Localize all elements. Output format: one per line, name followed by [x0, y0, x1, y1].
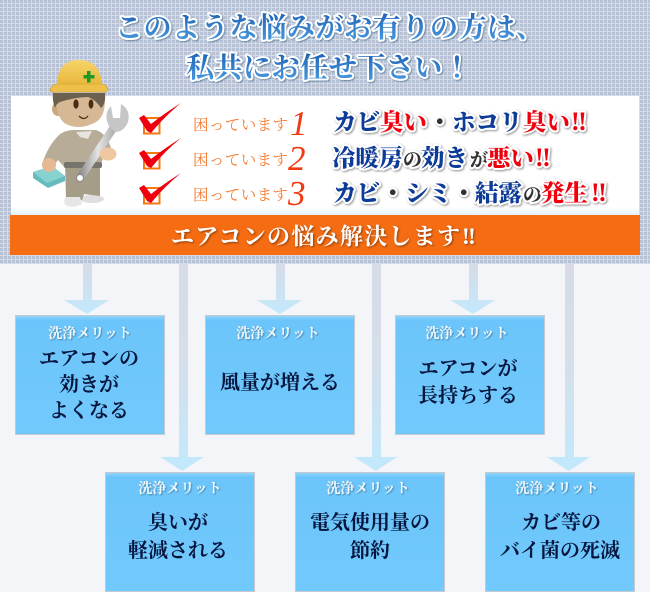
title: このような悩みがお有りの方は、 [115, 11, 544, 44]
problem 1 text: カビ [333, 110, 380, 136]
problem 2 text: 冷暖房 [332, 144, 402, 172]
panel: merit 6: カビ等の [521, 511, 601, 534]
problem 3 text: ・ [452, 181, 476, 207]
problem 1 text: 臭い [380, 109, 427, 136]
panel: merit 1: エアコンの [39, 348, 139, 370]
problem 3 text: シミ [405, 181, 452, 207]
problem 2 text: 悪い [487, 145, 534, 172]
problem 3 text: 発生 [541, 179, 588, 207]
panel: merit 5: 節約 [350, 539, 390, 562]
checklist row 2: 2 [288, 139, 306, 178]
problem 1 text: ホコリ [452, 110, 522, 136]
arrow 4 [354, 264, 397, 471]
problem 2 text: 効き [421, 145, 468, 172]
panel: merit 6 [486, 472, 634, 592]
arrow 1 [64, 264, 109, 314]
problem 3 text: !! [591, 178, 605, 207]
orange banner [10, 215, 640, 255]
checklist row 3: 困っています [193, 186, 288, 204]
problem 2 text: の [403, 150, 422, 171]
panel: merit 5: 洗浄メリット [326, 480, 410, 497]
panel: merit 1: 効きが [59, 373, 119, 396]
arrow 6 [547, 264, 590, 471]
panel: merit 3: 洗浄メリット [425, 325, 509, 342]
panel: merit 3 [396, 316, 544, 434]
checklist row 2 [139, 138, 306, 178]
arrow 5 [450, 264, 495, 314]
panel: merit 4: 軽減される [128, 539, 228, 562]
panel: merit 1: よくなる [49, 399, 129, 422]
panel: merit 2 [206, 316, 354, 434]
panel: merit 4 [106, 472, 254, 592]
checklist row 2: 困っています [193, 151, 288, 169]
checklist row 1: 困っています [193, 116, 288, 134]
problem 1 text: ・ [428, 110, 452, 136]
problem 2 text: が [470, 150, 488, 170]
problem 1 text: !! [571, 107, 585, 136]
white panel [11, 96, 639, 215]
panel: merit 1 [16, 316, 164, 434]
panel: merit 2: 洗浄メリット [236, 325, 320, 342]
panel: merit 6: バイ菌の死滅 [500, 539, 620, 562]
panel: merit 5 [296, 472, 444, 592]
problem 3 text: ・ [381, 181, 404, 207]
panel: merit 3: エアコンが [418, 358, 518, 380]
problem 1 text: 臭い [523, 109, 570, 136]
panel: merit 5: 電気使用量の [310, 511, 430, 534]
arrow 2 [160, 264, 204, 471]
problem 3 text: 結露 [475, 179, 522, 207]
title: 私共にお任せ下さい！ [186, 52, 471, 84]
checklist row 1 [139, 103, 308, 143]
panel: merit 6: 洗浄メリット [515, 480, 599, 497]
panel: merit 4: 洗浄メリット [138, 480, 222, 497]
title [115, 11, 544, 84]
checklist row 3: 3 [287, 174, 306, 213]
orange banner: エアコンの悩み解決します [171, 224, 461, 249]
problem 3 text: カビ [333, 181, 380, 207]
problem 2 text: !! [535, 143, 549, 172]
problem 3 text: の [523, 185, 542, 206]
panel: merit 3: 長持ちする [418, 384, 518, 407]
page background [0, 264, 650, 592]
checklist row 3 [139, 173, 306, 213]
orange banner: !! [462, 224, 474, 249]
arrow 3 [257, 264, 302, 314]
panel: merit 1: 洗浄メリット [48, 325, 132, 342]
panel: merit 4: 臭いが [148, 511, 208, 534]
panel: merit 2: 風量が増える [220, 371, 340, 394]
patterned header background [0, 0, 650, 264]
icon: worker with wrench and toolbox [33, 60, 129, 207]
checklist row 1: 1 [290, 104, 308, 143]
